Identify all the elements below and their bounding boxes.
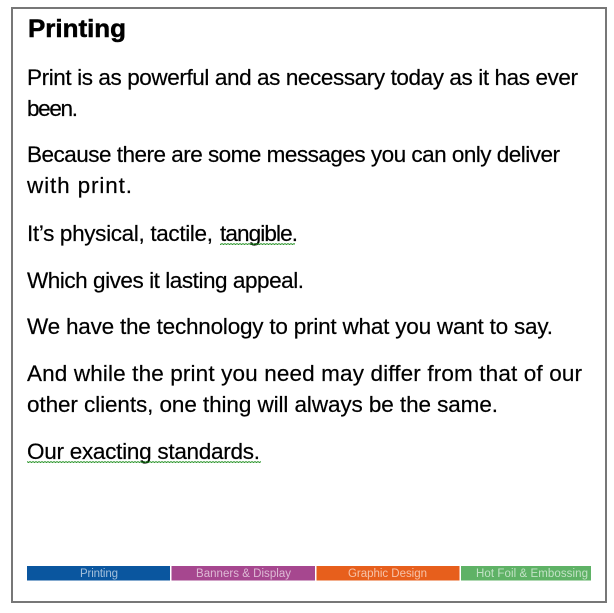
- heading: Printing: Printing: [28, 15, 126, 43]
- text block: clients: other clients, one thing will always be the same.: [27, 392, 498, 417]
- text block: physical, tactile, tangible: It’s physical, tactile,: [27, 221, 213, 246]
- nav tab: Hot Foil & Embossing: Hot Foil & Embossing: [476, 568, 588, 580]
- text block: opening statement: Print is as powerful and as necessary today as it has ever: [27, 65, 578, 90]
- text block: messages: with print.: [26, 173, 132, 198]
- nav tab: Banners & Display: [172, 566, 315, 580]
- text block: lasting appeal: Which gives it lasting appeal.: [27, 268, 304, 293]
- nav tab: Graphic Design: [316, 566, 460, 580]
- nav tab: Graphic Design: Graphic Design: [348, 568, 427, 580]
- text block: exacting standards: Our exacting standards.: [27, 439, 260, 464]
- text block: clients: [27, 361, 582, 417]
- nav tab: Printing: [27, 566, 170, 580]
- text block: technology: We have the technology to print what you want to say.: [27, 314, 553, 339]
- text block: physical, tactile, tangible: tangible.: [220, 221, 298, 246]
- nav tab: Banners & Display: Banners & Display: [196, 568, 291, 580]
- text block: physical, tactile, tangible: [27, 221, 298, 246]
- text block: opening statement: been.: [27, 96, 78, 121]
- text block: messages: Because there are some messages you can only deliver: [27, 142, 560, 167]
- navigation bar: [27, 566, 591, 580]
- text block: messages: [26, 142, 560, 198]
- nav tab: Printing: Printing: [80, 568, 118, 580]
- text block: clients: And while the print you need may differ from that of our: [27, 361, 582, 386]
- text block: opening statement: [27, 65, 578, 121]
